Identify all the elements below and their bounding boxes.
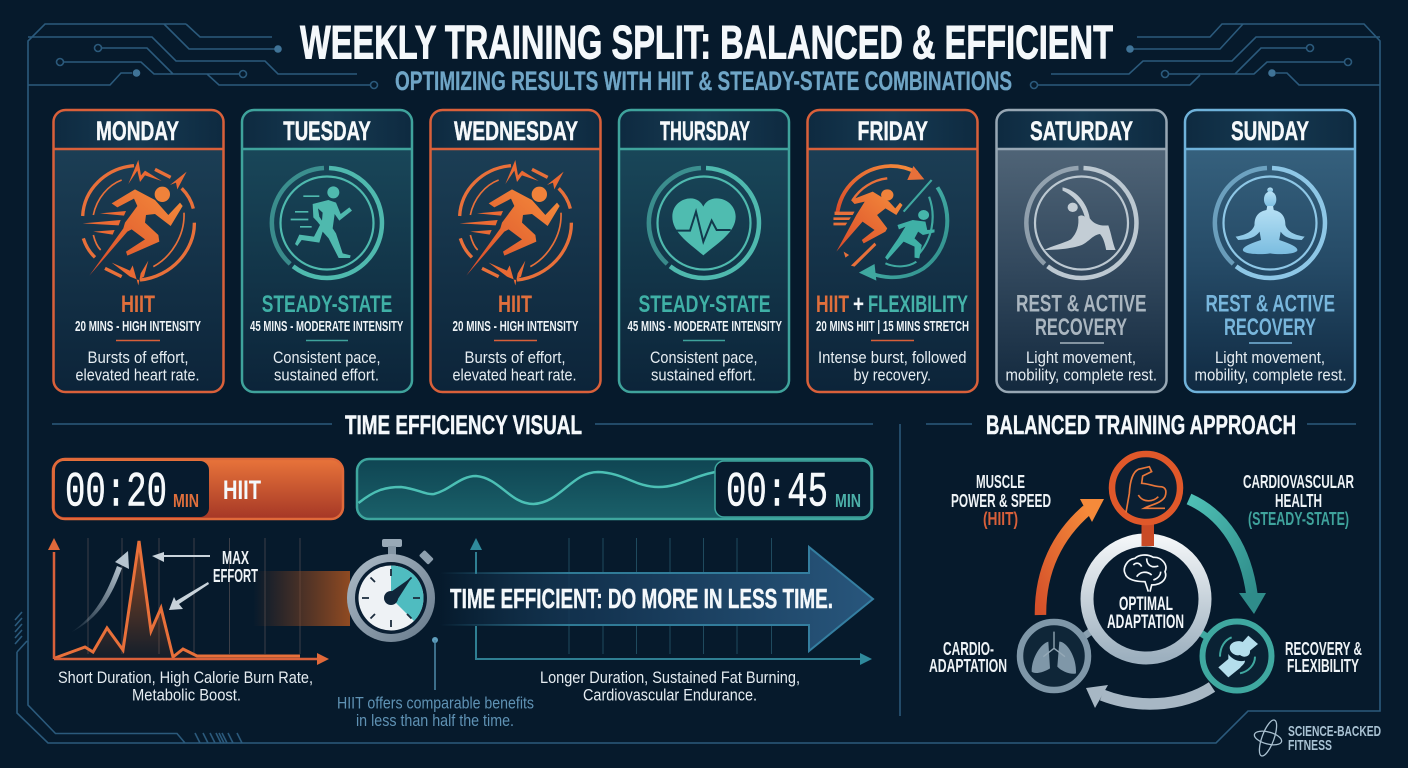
callout: hiit benefit: [337, 637, 534, 730]
panel: wednesday: [430, 110, 600, 392]
description: [818, 348, 966, 384]
icon: hiit runner: [460, 160, 571, 285]
steady-state timer bar: 00:45: [726, 464, 828, 520]
description: Consistent pace,: [273, 348, 380, 367]
label: cardiovascular health: CARDIOVASCULAR: [1243, 472, 1354, 492]
connectors: [1083, 523, 1207, 637]
description: Light movement,: [1026, 348, 1136, 367]
description: Consistent pace,: [650, 348, 758, 367]
node: lungs: [1020, 622, 1088, 690]
workout type: REST & ACTIVE: [1016, 290, 1146, 318]
description: elevated heart rate.: [76, 366, 200, 384]
description: [1194, 348, 1346, 384]
description: mobility, complete rest.: [1006, 366, 1157, 384]
node: joint recovery: [1202, 622, 1272, 690]
label: cardiovascular health: [1243, 472, 1354, 529]
label: cardio adaptation: [929, 639, 1007, 676]
workout type: [1016, 290, 1146, 341]
label: muscle power: POWER & SPEED: [951, 491, 1051, 511]
hiit timer bar: MIN: [173, 491, 199, 511]
description: Bursts of effort,: [464, 348, 566, 367]
description: Intense burst, followed: [818, 348, 966, 367]
icon: atom: [1253, 718, 1283, 758]
hiit timer bar: 00:20: [65, 464, 167, 520]
icon: stopwatch: [347, 539, 435, 642]
diagram: balanced training cycle: [929, 454, 1362, 708]
panel: tuesday: [242, 110, 412, 392]
label: optimal adaptation: [1107, 594, 1184, 633]
label: max effort: MAX: [222, 548, 249, 568]
arrow: rising effort: [70, 551, 129, 633]
hiit timer bar: [53, 459, 343, 520]
label: muscle power: [951, 472, 1051, 529]
arrow message: TIME EFFICIENT: DO MORE IN LESS TIME.: [450, 583, 833, 614]
label: cardio adaptation: CARDIO-: [943, 639, 994, 659]
workout type: FLEXIBILITY: [868, 291, 968, 318]
duration: 20 MINS - HIGH INTENSITY: [75, 318, 201, 335]
steady-state timer bar: [357, 459, 872, 520]
steady-state description: Cardiovascular Endurance.: [583, 686, 757, 704]
day label: THURSDAY: [660, 116, 750, 146]
description: [273, 348, 380, 384]
icon: brain: [1124, 555, 1166, 592]
callout: hiit benefit: HIIT offers comparable benefits: [337, 694, 534, 712]
day label: FRIDAY: [858, 116, 928, 146]
label: max effort: EFFORT: [213, 566, 258, 586]
workout type: +: [853, 291, 864, 318]
duration: 45 MINS - MODERATE INTENSITY: [250, 318, 403, 335]
workout type: REST & ACTIVE: [1206, 290, 1335, 318]
description: by recovery.: [854, 366, 931, 384]
label: optimal adaptation: OPTIMAL: [1119, 594, 1173, 615]
description: elevated heart rate.: [452, 366, 576, 384]
panel: saturday: [996, 110, 1166, 392]
center ring: [1087, 530, 1205, 658]
icon: heart: [649, 168, 759, 278]
label: cardio adaptation: ADAPTATION: [929, 656, 1007, 676]
label: cardiovascular health: (STEADY-STATE): [1248, 509, 1349, 529]
badge: science-backed fitness: FITNESS: [1288, 737, 1332, 754]
description: mobility, complete rest.: [1194, 366, 1346, 384]
steady-state description: [540, 668, 800, 704]
description: [650, 348, 758, 384]
brown transition band: [253, 571, 350, 626]
workout type: STEADY-STATE: [638, 291, 770, 318]
workout type: STEADY-STATE: [262, 291, 392, 318]
description: [1006, 348, 1157, 384]
icon: hiit and flexibility: [833, 166, 947, 281]
label: recovery: [1285, 639, 1362, 676]
label: max effort: [213, 548, 258, 586]
chart: hiit intensity: [48, 538, 329, 665]
day label: SUNDAY: [1231, 116, 1309, 146]
node: muscle: [1112, 454, 1180, 522]
description: sustained effort.: [274, 366, 379, 384]
badge: science-backed fitness: [1253, 718, 1381, 758]
icon: steady runner: [272, 168, 382, 278]
label: muscle power: (HIIT): [983, 509, 1018, 529]
duration: 45 MINS - MODERATE INTENSITY: [628, 318, 782, 335]
label: cardiovascular health: HEALTH: [1275, 491, 1322, 511]
arrow: peak pointer: [152, 552, 210, 562]
workout type: [1206, 290, 1335, 341]
hiit timer bar: HIIT: [223, 475, 261, 505]
steady-state description: Longer Duration, Sustained Fat Burning,: [540, 668, 800, 687]
description: Bursts of effort,: [88, 348, 188, 367]
description: [452, 348, 576, 384]
duration: 20 MINS - HIGH INTENSITY: [452, 318, 578, 335]
day label: TUESDAY: [283, 116, 371, 146]
hiit description: Short Duration, High Calorie Burn Rate,: [58, 668, 313, 687]
workout type: RECOVERY: [1035, 314, 1127, 341]
label: recovery: FLEXIBILITY: [1287, 656, 1359, 676]
icon: yoga pose: [1026, 168, 1136, 278]
big arrow: [440, 547, 873, 651]
workout type: HIIT: [498, 291, 532, 318]
label: muscle power: MUSCLE: [976, 472, 1025, 492]
panel: friday: [808, 110, 978, 392]
steady-state timer bar: MIN: [835, 491, 861, 511]
panel: monday: [54, 110, 224, 392]
description: sustained effort.: [651, 366, 756, 384]
arrow: orange arc: [1040, 499, 1104, 615]
arrow: gray arc: [1086, 685, 1212, 708]
hiit description: Metabolic Boost.: [132, 686, 241, 704]
workout type: [816, 291, 968, 318]
steady-state chart axes: [470, 538, 872, 665]
workout type: RECOVERY: [1224, 314, 1316, 341]
arrow: second peak pointer: [169, 582, 209, 610]
workout type: HIIT: [121, 291, 155, 318]
workout type: HIIT: [816, 291, 849, 318]
panel: sunday: [1185, 110, 1355, 392]
callout: hiit benefit: in less than half the time.: [356, 711, 514, 730]
day label: WEDNESDAY: [454, 116, 578, 146]
icon: meditation: [1215, 168, 1325, 278]
label: recovery: RECOVERY &: [1285, 639, 1362, 659]
heading: time efficiency: TIME EFFICIENCY VISUAL: [345, 410, 582, 440]
duration: 20 MINS HIIT | 15 MINS STRETCH: [816, 318, 969, 335]
hiit description: [58, 668, 313, 704]
description: [76, 348, 200, 384]
day label: SATURDAY: [1030, 116, 1133, 146]
subtitle: OPTIMIZING RESULTS WITH HIIT & STEADY-STATE COMBINATIONS: [395, 66, 1012, 96]
day label: MONDAY: [96, 116, 179, 146]
label: optimal adaptation: ADAPTATION: [1107, 612, 1184, 633]
arrow: teal arc: [1189, 499, 1266, 614]
description: Light movement,: [1215, 348, 1325, 367]
panel: thursday: [619, 110, 789, 392]
icon: hiit runner: [83, 160, 194, 285]
